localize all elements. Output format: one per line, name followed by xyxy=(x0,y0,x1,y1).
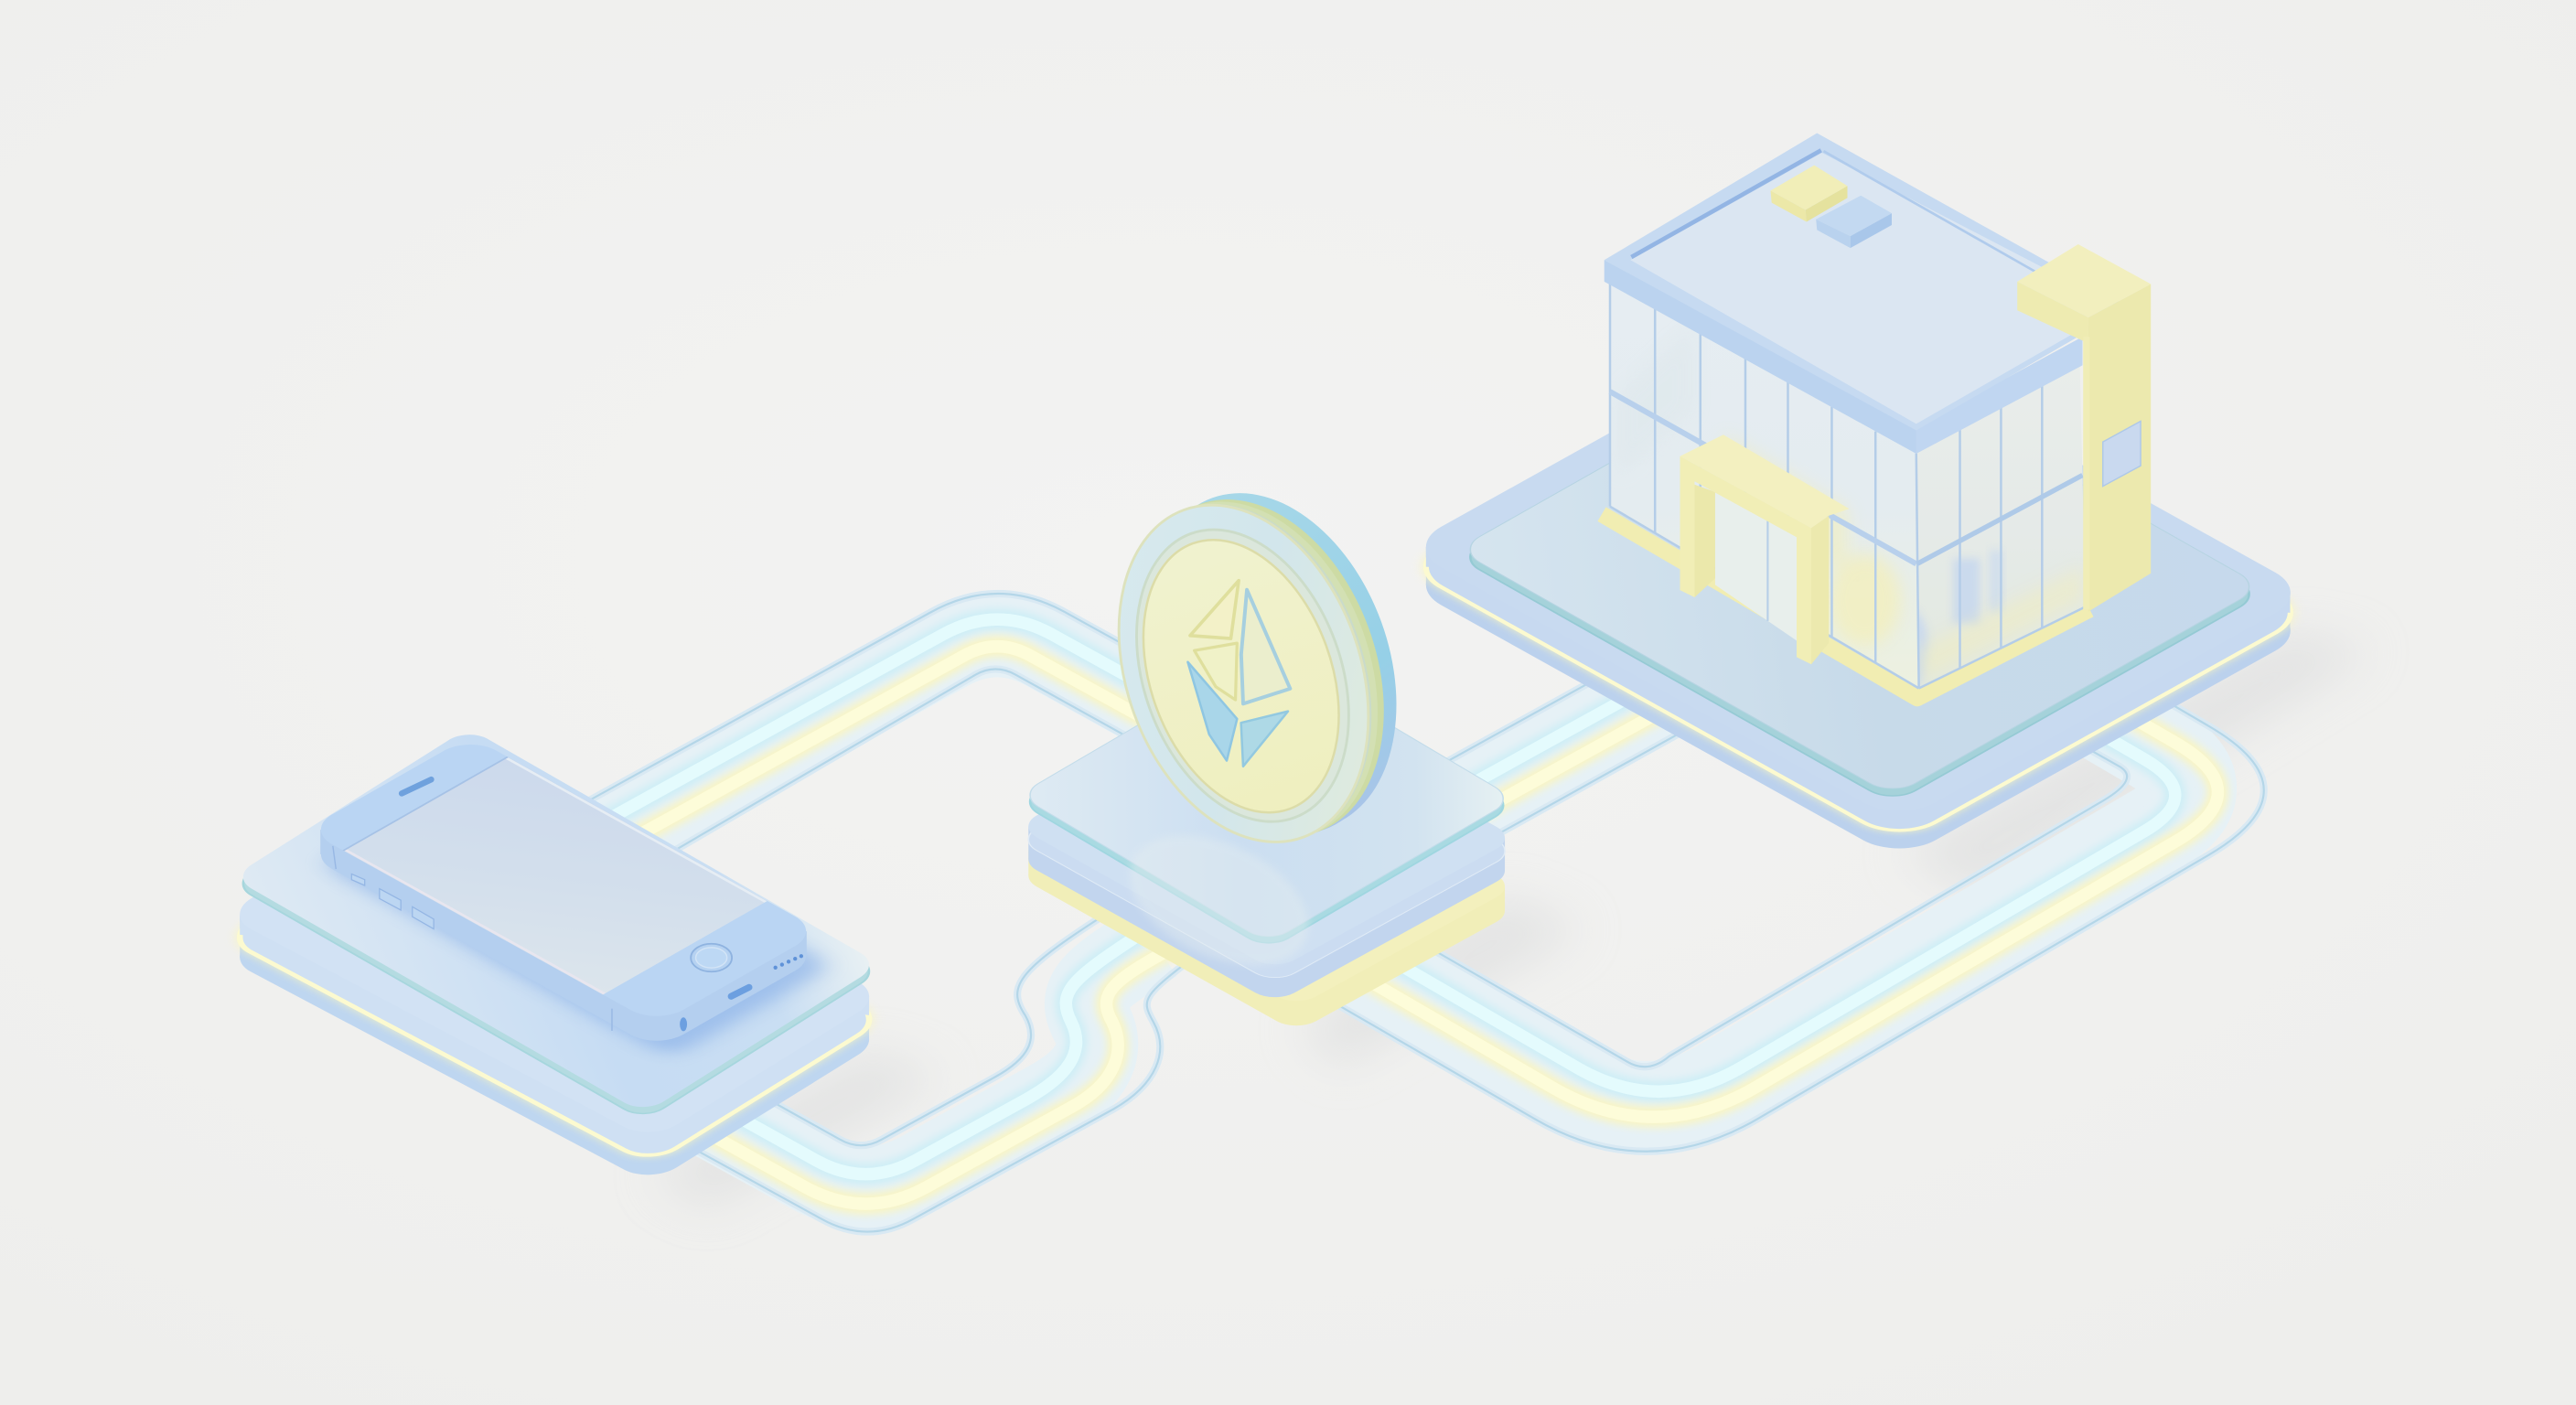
building left glass wall xyxy=(1610,282,1919,688)
coin plate glass xyxy=(1018,650,1515,949)
coin symbol xyxy=(1187,581,1290,767)
phone speaker grille xyxy=(774,954,803,970)
store platform xyxy=(1405,133,2312,860)
portal front face xyxy=(1680,456,1811,664)
building right glass wall xyxy=(1883,365,2086,692)
symbol upper right facet xyxy=(1241,590,1290,703)
phone body xyxy=(306,736,821,1049)
portal door glass xyxy=(1715,491,1797,640)
phone seams xyxy=(333,846,612,1031)
store building xyxy=(1602,133,2151,698)
floor shadows xyxy=(650,632,2374,1207)
connector: coin to building (short) xyxy=(1445,626,1725,841)
building yellow base xyxy=(1602,514,2089,698)
phone platform xyxy=(224,728,885,1184)
symbol lower left facet xyxy=(1187,662,1237,761)
store platform slab xyxy=(1405,317,2312,860)
building yellow column xyxy=(2017,244,2151,612)
roof blue vent box xyxy=(1816,196,1892,248)
phone screen xyxy=(343,756,767,994)
coin platform xyxy=(1017,458,1517,1032)
phone home button xyxy=(691,944,732,971)
phone headphone jack xyxy=(680,1017,687,1031)
phone contact shadow xyxy=(320,859,832,1057)
coin platform blue slab xyxy=(1017,693,1517,1003)
connector: phone to coin (upper) xyxy=(575,594,1191,856)
connector: coin to building (long loop) xyxy=(1315,683,2264,1152)
glass plate under phone xyxy=(231,728,881,1121)
coin xyxy=(1075,458,1442,877)
phone platform base slab xyxy=(224,770,885,1184)
symbol lower right facet xyxy=(1241,712,1288,767)
phone charging port xyxy=(731,987,749,996)
connector: phone to coin (S-curve) xyxy=(657,906,1199,1232)
symbol upper left facet xyxy=(1190,581,1239,638)
store glass plate xyxy=(1457,340,2262,803)
coin edge xyxy=(1077,458,1442,876)
coin face xyxy=(1075,470,1412,877)
phone side buttons xyxy=(351,874,434,929)
phone speaker xyxy=(402,779,431,793)
building entrance portal xyxy=(1680,434,1849,664)
coin reflection on plate xyxy=(1109,810,1329,992)
column wall panel xyxy=(2103,421,2141,487)
coin platform yellow base xyxy=(1017,730,1517,1032)
portal top face xyxy=(1680,434,1849,528)
building roof xyxy=(1605,133,2130,454)
roof yellow vent box xyxy=(1770,166,1848,221)
symbol middle facet xyxy=(1195,643,1237,700)
portal inner sides xyxy=(1694,485,1715,597)
